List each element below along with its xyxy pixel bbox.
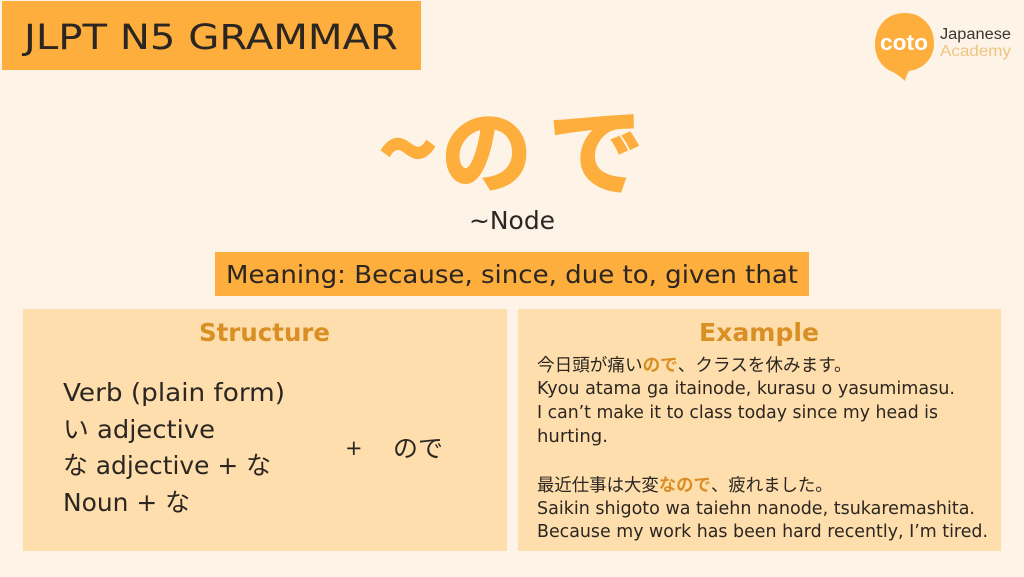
- meaning banner: Meaning: Because, since, due to, given that: [226, 260, 798, 289]
- heading: structure: Structure: [199, 318, 330, 347]
- panel: structure: [23, 309, 507, 551]
- heading: example: Example: [699, 318, 819, 347]
- title: ~ので: で: [548, 76, 644, 215]
- structure list: [63, 378, 285, 517]
- structure list: な adjective + な: [63, 451, 271, 480]
- panel: example: [518, 309, 1001, 551]
- meaning banner: [215, 252, 809, 296]
- plus ので: ので: [393, 429, 443, 465]
- example two: 最近仕事は大変なので、疲れました。: [537, 472, 833, 497]
- example two: Saikin shigoto wa taiehn nanode, tsukaremashita.: [537, 499, 975, 519]
- structure list: Verb (plain form): [63, 378, 285, 407]
- title: ~ので: [378, 68, 644, 217]
- logo: Coto Japanese Academy: coto: [880, 30, 928, 55]
- plus ので: +: [345, 436, 363, 460]
- structure list: Noun + な: [63, 488, 190, 517]
- example one: Kyou atama ga itainode, kurasu o yasumimasu.: [537, 379, 955, 399]
- romaji: ~Node: ~Node: [469, 206, 555, 235]
- structure list: い adjective: [63, 415, 215, 444]
- logo: Coto Japanese Academy: Academy: [940, 43, 1011, 60]
- example two: Because my work has been hard recently, I’m tired.: [537, 522, 988, 542]
- title: ~ので: ~: [378, 68, 438, 217]
- example one: hurting.: [537, 427, 608, 447]
- example one: I can’t make it to class today since my head is: [537, 403, 938, 423]
- example two: [537, 472, 988, 542]
- example one: [537, 352, 955, 447]
- example one: 今日頭が痛いので、クラスを休みます。: [537, 352, 852, 377]
- banner: JLPT N5 Grammar: JLPT N5 GRAMMAR: [22, 18, 398, 58]
- banner: JLPT N5 Grammar: [2, 1, 421, 70]
- logo: Coto Japanese Academy: Japanese: [940, 26, 1011, 43]
- title: ~ので: の: [441, 80, 532, 212]
- plus ので: [345, 429, 443, 465]
- logo: Coto Japanese Academy: [875, 13, 1011, 81]
